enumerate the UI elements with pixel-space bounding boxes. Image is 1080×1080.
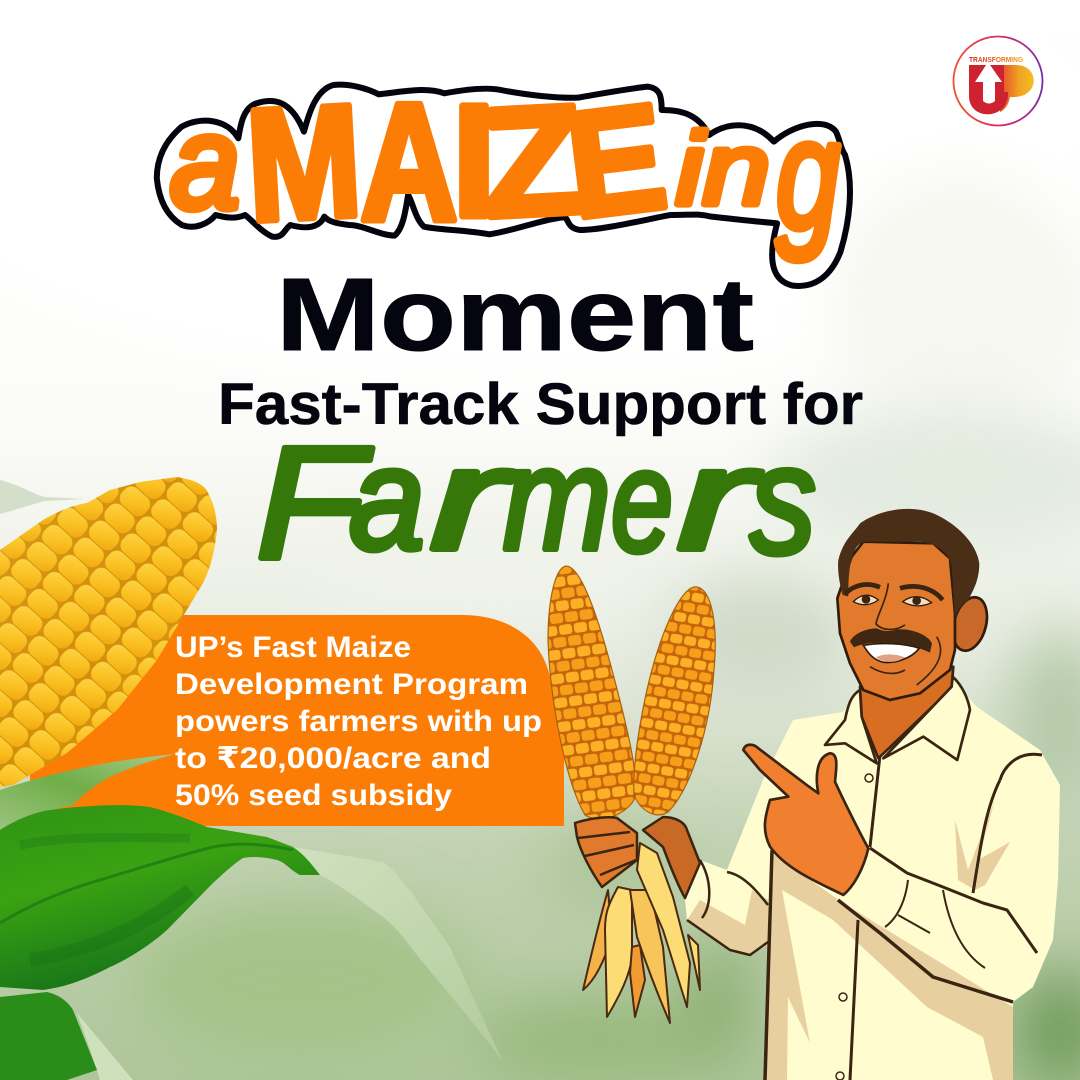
corn cob: right in hand — [634, 587, 715, 815]
panel text: to ₹20,000/acre and — [175, 742, 491, 775]
logo: Transforming UP — [954, 36, 1042, 126]
panel: orange program callout — [30, 615, 564, 826]
heading: Farmers: a — [349, 417, 425, 580]
panel text: Development Program — [175, 668, 528, 701]
panel text: UP’s Fast Maize — [175, 631, 411, 664]
panel text: 50% seed subsidy — [175, 779, 452, 812]
eyes — [853, 595, 932, 606]
subheading: Fast-Track Support for: Fast-Track Support for — [218, 372, 863, 437]
logo P shape — [1000, 65, 1034, 112]
corn husks — [583, 843, 700, 1023]
moustache — [850, 628, 932, 653]
heading: Farmers: m — [503, 417, 611, 580]
leaf: top left pale tip — [0, 480, 85, 514]
brows — [845, 585, 943, 600]
title: aMAIZEing sticker — [157, 68, 850, 286]
shirt lines — [973, 780, 1000, 893]
smile — [863, 644, 919, 662]
chin lines — [870, 637, 941, 685]
sticker letters: I — [452, 71, 496, 250]
heading: Farmers: r — [677, 417, 761, 580]
heading: Farmers: s — [750, 413, 816, 586]
illustration: farmer holding corn — [548, 509, 1060, 1080]
neck — [860, 667, 953, 758]
logo wordmark: TRANSFORMING — [969, 55, 1023, 64]
sticker letters: E — [558, 71, 674, 250]
right ear — [947, 593, 993, 655]
shirt shadows — [765, 853, 1013, 1080]
heading: Farmers: e — [611, 419, 673, 582]
heading: Moment: Moment — [276, 257, 754, 372]
heading: Farmers: F — [256, 413, 373, 592]
leaf: pale upper blade — [0, 754, 175, 830]
sticker letters: Z — [479, 72, 588, 250]
sticker letters: g — [776, 88, 840, 262]
leaf: big green — [0, 805, 320, 990]
panel text — [175, 631, 542, 812]
sticker letters: M — [242, 70, 366, 255]
panel text: powers farmers with up — [175, 705, 542, 738]
corn cob: large left — [0, 477, 217, 787]
nose — [876, 583, 905, 629]
sticker outline — [157, 85, 850, 286]
shirt silhouette — [685, 677, 1060, 1080]
logo white arrow — [975, 62, 1002, 104]
sticker letters: in — [676, 112, 770, 226]
heading: Farmers — [256, 413, 816, 592]
face — [837, 542, 955, 700]
farmer hand holding corn — [575, 817, 700, 898]
sticker letters: A — [360, 68, 458, 256]
sticker letters: a — [170, 89, 240, 236]
logo U shape — [969, 65, 1008, 114]
pointing hand — [743, 745, 868, 895]
sticker letters — [170, 68, 840, 262]
leaf: pale long blade — [207, 827, 503, 1062]
farmer head and pointing hand, traced in zoom coordinates — [743, 509, 993, 895]
panel shape — [30, 615, 564, 826]
collar — [825, 677, 970, 763]
farmer shirt — [685, 677, 1060, 1080]
hair — [838, 509, 979, 617]
heading: Farmers: r — [430, 417, 514, 580]
leaf: bottom left — [0, 992, 133, 1080]
corn cob: left in hand — [548, 566, 636, 819]
